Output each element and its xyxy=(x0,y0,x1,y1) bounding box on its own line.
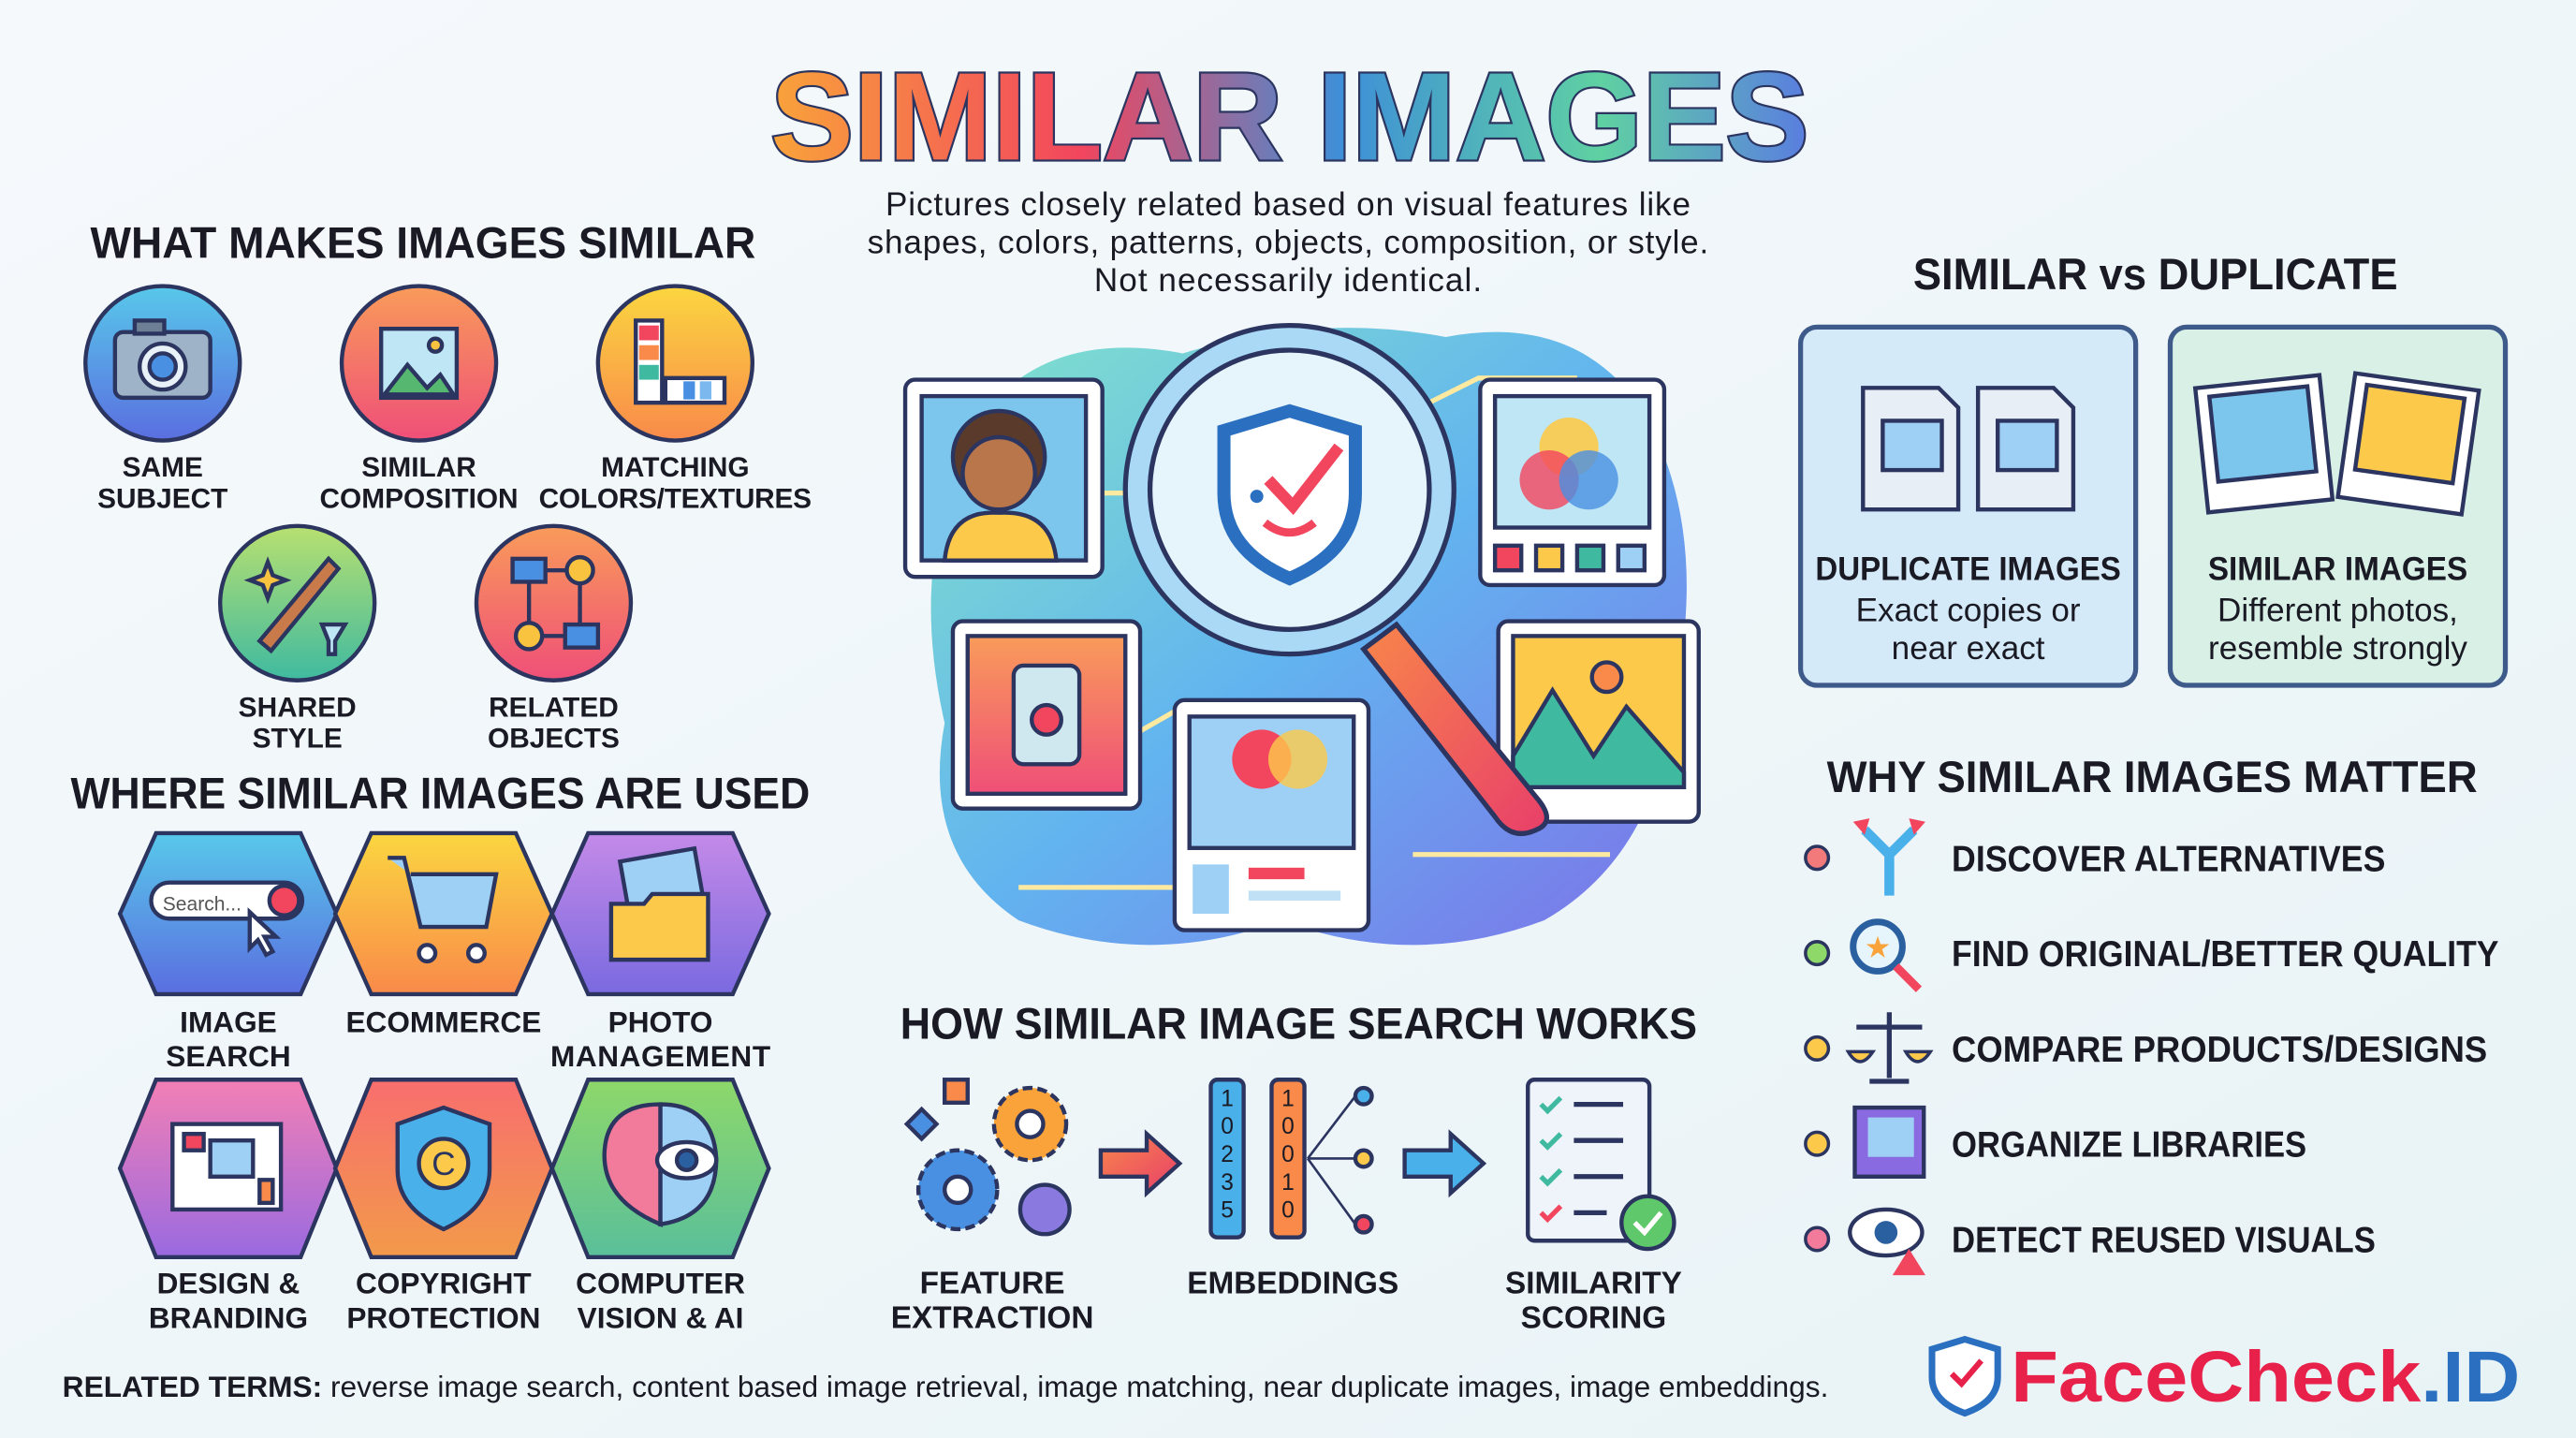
icon: two photos xyxy=(2195,374,2479,514)
list: why matter xyxy=(1806,818,2499,1275)
labels: what makes similar: SHARED xyxy=(239,692,357,723)
labels: what makes similar: MATCHING xyxy=(601,452,750,483)
labels: what makes similar: COMPOSITION xyxy=(319,483,519,514)
panel: what makes images similar xyxy=(85,286,753,681)
labels: what makes similar: COLORS/TEXTURES xyxy=(539,483,812,514)
icon: embeddings: 0 xyxy=(1281,1114,1295,1139)
labels: what makes similar: OBJECTS xyxy=(488,724,620,755)
panel: hexagons xyxy=(120,833,768,1257)
labels: what makes similar: SIMILAR xyxy=(361,452,476,483)
heading: how it works: HOW SIMILAR IMAGE SEARCH WORKS xyxy=(900,999,1697,1049)
labels: how it works: EMBEDDINGS xyxy=(1187,1266,1398,1300)
labels: how it works: SCORING xyxy=(1521,1300,1666,1335)
icon: related objects xyxy=(476,526,631,681)
card: landscape xyxy=(1499,622,1699,822)
labels: where used: PHOTO xyxy=(608,1005,712,1038)
panel: duplicate images: DUPLICATE IMAGES xyxy=(1815,551,2121,588)
panel: similar images: Different photos, xyxy=(2217,593,2458,629)
panel: duplicate images: near exact xyxy=(1892,630,2045,667)
icon: embeddings: 1 xyxy=(1281,1086,1295,1111)
panel: duplicate images: Exact copies or xyxy=(1856,593,2081,629)
labels: where used: BRANDING xyxy=(149,1300,308,1334)
labels: where used: PROTECTION xyxy=(346,1300,540,1334)
card: bottom xyxy=(1175,700,1368,931)
labels: how it works xyxy=(891,1266,1682,1335)
icon: ecommerce hex xyxy=(335,833,552,994)
item: detect: DETECT REUSED VISUALS xyxy=(1952,1221,2376,1261)
panel: similar images xyxy=(2170,327,2506,685)
icon: composition xyxy=(342,286,496,441)
labels: what makes similar: RELATED xyxy=(489,692,619,723)
icon: image search hex xyxy=(120,833,337,994)
item: organize: ORGANIZE LIBRARIES xyxy=(1952,1125,2306,1166)
labels: where used: VISION & AI xyxy=(578,1300,743,1334)
labels: how it works: SIMILARITY xyxy=(1505,1266,1682,1300)
icon: brush xyxy=(220,526,374,681)
card: colors xyxy=(1480,380,1664,585)
subtitle xyxy=(868,186,1708,299)
icon: embeddings: 1 xyxy=(1221,1086,1234,1111)
item: organize xyxy=(1806,1108,2306,1177)
subtitle: shapes, colors, patterns, objects, composition, or style. xyxy=(868,224,1708,260)
icon: gears xyxy=(907,1079,1070,1234)
heading: where used: WHERE SIMILAR IMAGES ARE USED xyxy=(70,770,810,819)
icon: copyright hex: C xyxy=(432,1146,456,1182)
item: find original xyxy=(1806,922,2499,990)
icon: embeddings: 5 xyxy=(1221,1198,1234,1224)
icon: embeddings: 0 xyxy=(1281,1198,1295,1224)
item: detect xyxy=(1806,1210,2376,1275)
labels: how it works: FEATURE xyxy=(920,1266,1065,1300)
item: find original: FIND ORIGINAL/BETTER QUALITY xyxy=(1952,934,2499,975)
icon: embeddings: 2 xyxy=(1221,1142,1234,1167)
title: SIMILAR IMAGES xyxy=(770,47,1808,186)
card: person xyxy=(905,380,1103,577)
labels: where used: MANAGEMENT xyxy=(550,1039,770,1073)
logo: FaceCheck.ID: FaceCheck .ID xyxy=(2011,1337,2520,1417)
icon: embeddings xyxy=(1211,1079,1372,1238)
item: compare xyxy=(1806,1012,2487,1081)
arrow xyxy=(1405,1134,1484,1193)
blob background xyxy=(931,328,1687,945)
labels: where used: DESIGN & xyxy=(157,1266,300,1299)
labels: where used xyxy=(149,1005,770,1334)
labels: how it works: EXTRACTION xyxy=(891,1300,1093,1335)
labels: where used: SEARCH xyxy=(166,1039,291,1073)
center illustration xyxy=(905,326,1699,945)
heading: similar vs duplicate: SIMILAR vs DUPLICATE xyxy=(1913,250,2398,300)
icon: embeddings: 0 xyxy=(1281,1142,1295,1167)
icon: duplicate docs xyxy=(1863,388,2073,509)
icon: embeddings: 0 xyxy=(1221,1114,1234,1139)
labels: where used: ECOMMERCE xyxy=(345,1005,541,1038)
panel: similar images: resemble strongly xyxy=(2208,630,2467,667)
circuit lines xyxy=(1018,378,1610,888)
panel: duplicate images xyxy=(1801,327,2136,685)
subtitle: Not necessarily identical. xyxy=(1094,262,1482,299)
item: discover: DISCOVER ALTERNATIVES xyxy=(1952,839,2385,879)
icon: embeddings: 3 xyxy=(1221,1170,1234,1196)
labels: what makes similar xyxy=(97,452,812,755)
labels: what makes similar: STYLE xyxy=(253,724,343,755)
icon: design hex xyxy=(120,1079,337,1257)
panel: similar images: SIMILAR IMAGES xyxy=(2208,551,2467,588)
icon: camera xyxy=(85,286,240,441)
item: compare: COMPARE PRODUCTS/DESIGNS xyxy=(1952,1030,2487,1070)
icon: checklist xyxy=(1528,1079,1674,1249)
related terms: RELATED TERMS: reverse image search, content based image retrieval, image matching, near duplicate images, image embeddings. xyxy=(63,1370,1828,1403)
item: find original: ★ xyxy=(1866,933,1890,962)
heading: why matter: WHY SIMILAR IMAGES MATTER xyxy=(1827,753,2478,802)
card: jar xyxy=(953,622,1140,809)
labels: where used: COMPUTER xyxy=(576,1266,745,1299)
icon: computer vision hex xyxy=(552,1079,768,1257)
icon: photo management hex xyxy=(552,833,768,994)
icon: copyright hex xyxy=(335,1079,552,1257)
labels: what makes similar: SUBJECT xyxy=(97,483,227,514)
labels: where used: IMAGE xyxy=(180,1005,277,1038)
icon: image search hex: Search... xyxy=(163,893,242,915)
arrow xyxy=(1101,1134,1179,1193)
labels: where used: COPYRIGHT xyxy=(356,1266,532,1299)
icon: embeddings: 1 xyxy=(1281,1170,1295,1196)
process: how it works xyxy=(907,1079,1674,1249)
heading: what makes images similar: WHAT MAKES IMAGES SIMILAR xyxy=(91,219,755,269)
subtitle: Pictures closely related based on visual features like xyxy=(886,186,1690,223)
labels: what makes similar: SAME xyxy=(123,452,203,483)
icon: color swatches xyxy=(598,286,753,441)
item: discover xyxy=(1806,818,2385,896)
icon: magnifying glass with shield xyxy=(1125,326,1546,833)
